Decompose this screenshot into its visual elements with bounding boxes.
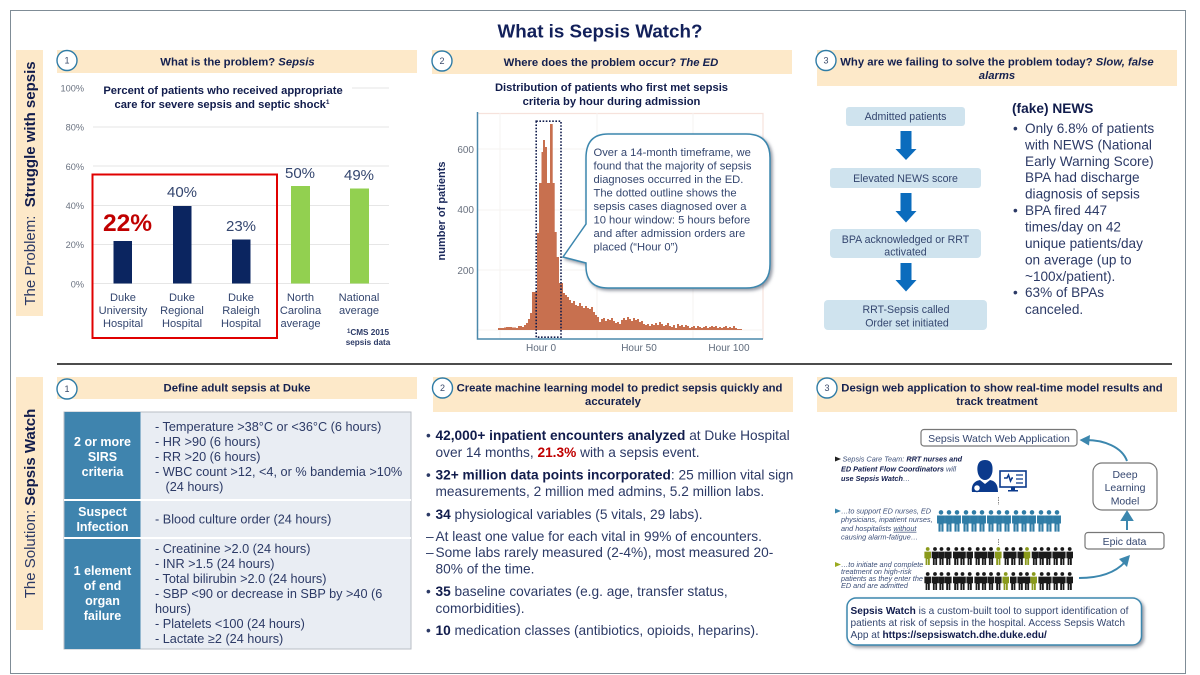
table: sepsis criteria: of end bbox=[84, 579, 121, 593]
bar chart: Regional bbox=[160, 305, 204, 317]
chart title: 1 bbox=[326, 99, 330, 106]
text block: model data: • bbox=[426, 623, 431, 638]
arrow: model to web application bbox=[1080, 435, 1127, 461]
text block: high risk patients: …to initiate and complete bbox=[841, 560, 923, 569]
text block: fake NEWS: Only 6.8% of patients bbox=[1025, 121, 1154, 136]
text block: care team bbox=[835, 454, 963, 483]
histogram: 200 bbox=[457, 266, 474, 277]
bar chart: Hospital bbox=[162, 318, 202, 330]
box: deep learning model bbox=[1093, 463, 1157, 510]
flowchart: RRT-Sepsis called bbox=[863, 304, 949, 316]
histogram: 400 bbox=[457, 205, 474, 216]
text block: fake NEWS: with NEWS (National bbox=[1024, 138, 1152, 152]
bar chart: 22% bbox=[103, 210, 152, 237]
box: epic data bbox=[1085, 532, 1164, 549]
flowchart: BPA acknowledged or RRT bbox=[842, 234, 969, 246]
text block: model data: – bbox=[426, 529, 434, 544]
section label: the problem: The Problem: Struggle with sepsis bbox=[22, 61, 39, 306]
icon: row of clinicians bbox=[937, 510, 1061, 532]
bar chart: Duke bbox=[228, 292, 254, 304]
table: sepsis criteria: - Total bilirubin >2.0 (24 hours) bbox=[155, 572, 326, 586]
callout: sepsis watch description: patients at risk of sepsis in the hospital. Access Sepsis Watch bbox=[850, 618, 1125, 629]
chart title: care for severe sepsis and septic shock bbox=[114, 99, 330, 111]
box: deep learning model: Learning bbox=[1105, 482, 1146, 494]
bar chart: 49% bbox=[344, 167, 374, 184]
chart axis labels: 80% bbox=[66, 122, 84, 132]
box: deep learning model: Model bbox=[1111, 496, 1139, 508]
text block: high risk patients bbox=[835, 560, 923, 590]
text block: high risk patients: ED and are admitted bbox=[841, 581, 909, 590]
panel: design web application bbox=[817, 377, 1177, 645]
table: sepsis criteria bbox=[64, 412, 411, 649]
text block: fake NEWS: times/day on 42 bbox=[1025, 220, 1121, 234]
bar chart: Hospital bbox=[103, 318, 143, 330]
text block: model data: 10 medication classes (antibiotics, opioids, heparins). bbox=[436, 623, 759, 638]
text block: fake NEWS: unique patients/day bbox=[1025, 236, 1143, 251]
text block: high risk patients: treatment on high-risk bbox=[841, 567, 912, 576]
heading: why are we failing bbox=[816, 50, 1177, 86]
callout: ED finding: placed (“Hour 0”) bbox=[594, 242, 678, 254]
text block: support nurses bbox=[835, 506, 933, 542]
text block: fake NEWS: BPA fired 447 bbox=[1025, 203, 1107, 218]
flowchart bbox=[824, 107, 987, 330]
heading: why are we failing: 3 bbox=[823, 56, 829, 66]
text block: model data: • bbox=[426, 584, 431, 599]
chart axis labels: 40% bbox=[66, 201, 84, 211]
chart title: criteria by hour during admission bbox=[523, 96, 701, 108]
panel: define adult sepsis bbox=[57, 377, 417, 649]
text block: model data: 35 baseline covariates (e.g. age, transfer status, bbox=[436, 584, 728, 599]
text block: model data: comorbidities). bbox=[436, 601, 524, 616]
text block: fake NEWS: 63% of BPAs bbox=[1025, 285, 1104, 300]
bar chart: Hospital bbox=[221, 318, 261, 330]
callout: sepsis watch description bbox=[847, 598, 1142, 645]
box: epic data: Epic data bbox=[1103, 536, 1147, 548]
callout: ED finding: found that the majority of sepsis bbox=[594, 160, 752, 172]
heading: what is the problem bbox=[57, 50, 417, 73]
callout: duke hospitals highlight box bbox=[92, 174, 277, 338]
text block: fake NEWS: on average (up to bbox=[1025, 252, 1132, 268]
heading: where does the problem occur: 2 bbox=[439, 56, 445, 66]
table: sepsis criteria: (24 hours) bbox=[166, 480, 223, 494]
callout: ED finding: The dotted outline shows the bbox=[594, 188, 737, 200]
heading: design web application: 3 bbox=[824, 383, 830, 393]
heading: why are we failing: Why are we failing to solve the problem today? Slow, false bbox=[840, 56, 1154, 68]
histogram: Hour 50 bbox=[621, 343, 657, 354]
callout: sepsis watch description: Sepsis Watch is a custom-built tool to support identification of bbox=[850, 606, 1129, 617]
table: sepsis criteria: organ bbox=[85, 594, 120, 608]
heading: machine learning model: accurately bbox=[585, 396, 642, 408]
footnote: CMS 2015 bbox=[350, 328, 389, 337]
panel: where does the problem occur bbox=[432, 50, 792, 354]
table: sepsis criteria: - HR >90 (6 hours) bbox=[155, 435, 260, 449]
arrow: epic data to model bbox=[1122, 512, 1132, 530]
chart title: Distribution of patients who first met sepsis bbox=[495, 82, 728, 94]
histogram: 600 bbox=[457, 145, 474, 156]
box: deep learning model: Deep bbox=[1112, 469, 1138, 481]
chart axis labels: 0% bbox=[71, 280, 84, 290]
text block: model data: – bbox=[426, 545, 434, 560]
icon: patients row two bbox=[924, 572, 1073, 590]
heading: define adult sepsis: 1 bbox=[64, 384, 70, 394]
bar chart: Carolina bbox=[280, 305, 322, 317]
text block: model data: Some labs rarely measured (2-4%), most measured 20- bbox=[436, 545, 773, 560]
section label: the solution: The Solution: Sepsis Watch bbox=[22, 409, 39, 598]
text block: model data: • bbox=[426, 468, 431, 482]
chart axis labels bbox=[60, 84, 84, 290]
text block: model data: measurements, 2 million med admins, 5.2 million labs. bbox=[436, 484, 764, 499]
text block: care team: use Sepsis Watch… bbox=[841, 474, 910, 483]
bar chart: Duke bbox=[169, 292, 195, 304]
text block: support nurses: …to support ED nurses, ED bbox=[841, 506, 932, 516]
title: What is Sepsis Watch? bbox=[498, 20, 702, 42]
heading: where does the problem occur: Where does the problem occur? The ED bbox=[504, 57, 718, 69]
chart axis labels: 100% bbox=[60, 84, 84, 94]
table: sepsis criteria: - Blood culture order (24 hours) bbox=[155, 512, 331, 526]
footnote: sepsis data bbox=[346, 338, 391, 347]
arrow: patients to epic data bbox=[1079, 555, 1130, 578]
callout: sepsis watch description: App at https://sepsiswatch.dhe.duke.edu/ bbox=[850, 630, 1047, 641]
heading: what is the problem: What is the problem? Sepsis bbox=[160, 57, 315, 69]
heading: what is the problem: 1 bbox=[64, 56, 70, 66]
table: sepsis criteria: Infection bbox=[76, 520, 129, 534]
bar chart: 40% bbox=[167, 184, 197, 201]
heading: why are we failing: alarms bbox=[979, 70, 1015, 82]
callout: ED finding: diagnoses occurred in the ED. bbox=[594, 174, 743, 186]
box: sepsis watch web application bbox=[921, 430, 1077, 446]
text block: fake NEWS: • bbox=[1013, 121, 1018, 136]
text block: model data: At least one value for each vital in 99% of encounters. bbox=[436, 529, 762, 544]
text block: model data: 34 physiological variables (5 vitals, 29 labs). bbox=[436, 507, 703, 522]
text block: model data: • bbox=[426, 428, 431, 443]
text block: fake NEWS: • bbox=[1013, 285, 1018, 300]
flowchart: Order set initiated bbox=[865, 318, 949, 330]
callout: ED finding bbox=[563, 134, 770, 288]
heading: design web application: Design web application to show real-time model results and bbox=[841, 383, 1163, 395]
histogram bbox=[436, 112, 763, 354]
histogram: Hour 0 bbox=[526, 343, 556, 354]
table: sepsis criteria: - SBP <90 or decrease in SBP by >40 (6 bbox=[155, 587, 382, 601]
callout: ED finding: and after admission orders are bbox=[594, 228, 745, 240]
text block: care team: Sepsis Care Team: RRT nurses and bbox=[842, 454, 963, 464]
chart axis labels: 20% bbox=[66, 240, 84, 250]
text block: support nurses: causing alarm-fatigue… bbox=[841, 532, 918, 542]
table: sepsis criteria: - INR >1.5 (24 hours) bbox=[155, 557, 275, 571]
text block: support nurses: and hospitalists without bbox=[841, 524, 917, 533]
heading: machine learning model bbox=[432, 377, 793, 412]
text block: model data: 32+ million data points incorporated: 25 million vital sign bbox=[436, 468, 793, 482]
heading: where does the problem occur bbox=[432, 50, 792, 74]
text block: fake NEWS: Early Warning Score) bbox=[1025, 154, 1154, 169]
heading: machine learning model: Create machine learning model to predict sepsis quickly and bbox=[457, 383, 782, 395]
text block: care team: ED Patient Flow Coordinators will bbox=[841, 464, 957, 474]
text block: fake NEWS: • bbox=[1013, 203, 1018, 218]
text block: fake NEWS bbox=[1012, 101, 1154, 317]
text block: model data bbox=[426, 428, 793, 638]
panel: what is the problem bbox=[57, 50, 417, 347]
callout: ED finding: sepsis cases diagnosed over a bbox=[594, 201, 747, 213]
text block: fake NEWS: diagnosis of sepsis bbox=[1025, 187, 1140, 202]
table: sepsis criteria: hours) bbox=[155, 602, 191, 616]
chart title: Percent of patients who received appropriate bbox=[103, 85, 343, 97]
table: sepsis criteria: 2 or more bbox=[74, 435, 131, 449]
text block: model data: 80% of the time. bbox=[436, 562, 534, 576]
bar chart: 50% bbox=[285, 165, 315, 182]
text block: fake NEWS: (fake) NEWS bbox=[1012, 101, 1093, 116]
text block: model data: • bbox=[426, 507, 431, 522]
footnote: 1 bbox=[347, 329, 351, 335]
text block: model data: over 14 months, 21.3% with a sepsis event. bbox=[436, 445, 700, 460]
histogram: number of patients bbox=[436, 161, 448, 261]
icon: patients row one bbox=[924, 547, 1073, 565]
bar chart: 23% bbox=[226, 218, 256, 235]
bar chart: Raleigh bbox=[222, 305, 260, 317]
table: sepsis criteria: 1 element bbox=[74, 564, 132, 578]
table: sepsis criteria: - Platelets <100 (24 hours) bbox=[155, 617, 305, 631]
text block: support nurses: physicians, inpatient nurses, bbox=[840, 515, 933, 524]
table: sepsis criteria: Suspect bbox=[78, 505, 128, 519]
text block: model data: 42,000+ inpatient encounters analyzed at Duke Hospital bbox=[436, 428, 790, 443]
table: sepsis criteria: SIRS bbox=[88, 450, 117, 464]
heading: machine learning model: 2 bbox=[440, 383, 445, 393]
text block: high risk patients: patients as they enter the bbox=[840, 574, 923, 583]
table: sepsis criteria: - Temperature >38°C or <36°C (6 hours) bbox=[155, 420, 381, 434]
table: sepsis criteria: criteria bbox=[82, 465, 124, 479]
bar chart bbox=[99, 165, 379, 330]
table: sepsis criteria: failure bbox=[84, 609, 121, 623]
bar chart: average bbox=[280, 318, 321, 330]
flowchart: activated bbox=[884, 246, 927, 258]
chart axis labels: 60% bbox=[66, 162, 84, 172]
flowchart: Elevated NEWS score bbox=[853, 173, 958, 185]
bar chart: National bbox=[339, 292, 379, 304]
text block: fake NEWS: ~100x/patient). bbox=[1025, 269, 1115, 284]
callout: ED finding: Over a 14-month timeframe, we bbox=[594, 147, 751, 159]
bar chart: average bbox=[339, 305, 379, 317]
heading: define adult sepsis: Define adult sepsis at Duke bbox=[164, 382, 310, 394]
bar chart: University bbox=[99, 305, 148, 317]
panel: create machine learning model bbox=[426, 377, 793, 638]
section label: the problem bbox=[16, 50, 43, 316]
text block: fake NEWS: BPA had discharge bbox=[1025, 170, 1140, 185]
callout: ED finding: 10 hour window: 5 hours before bbox=[594, 214, 750, 226]
table: sepsis criteria: - Creatinine >2.0 (24 hours) bbox=[155, 542, 311, 556]
box: sepsis watch web application: Sepsis Watch Web Application bbox=[928, 433, 1070, 445]
text block: fake NEWS: canceled. bbox=[1025, 302, 1083, 317]
table: sepsis criteria: - WBC count >12, <4, or % bandemia >10% bbox=[155, 465, 402, 479]
histogram: Hour 100 bbox=[708, 343, 750, 354]
heading: define adult sepsis bbox=[57, 377, 417, 399]
panel: why are we failing bbox=[816, 50, 1177, 330]
bar chart: North bbox=[287, 292, 314, 304]
table: sepsis criteria: - Lactate ≥2 (24 hours) bbox=[155, 632, 283, 646]
heading: design web application bbox=[817, 377, 1177, 412]
table: sepsis criteria: - RR >20 (6 hours) bbox=[155, 450, 260, 464]
flowchart: Admitted patients bbox=[865, 111, 946, 123]
heading: design web application: track treatment bbox=[956, 396, 1038, 408]
section label: the solution bbox=[16, 377, 43, 630]
icon: clinician with monitor bbox=[972, 460, 1026, 492]
bar chart: Duke bbox=[110, 292, 136, 304]
